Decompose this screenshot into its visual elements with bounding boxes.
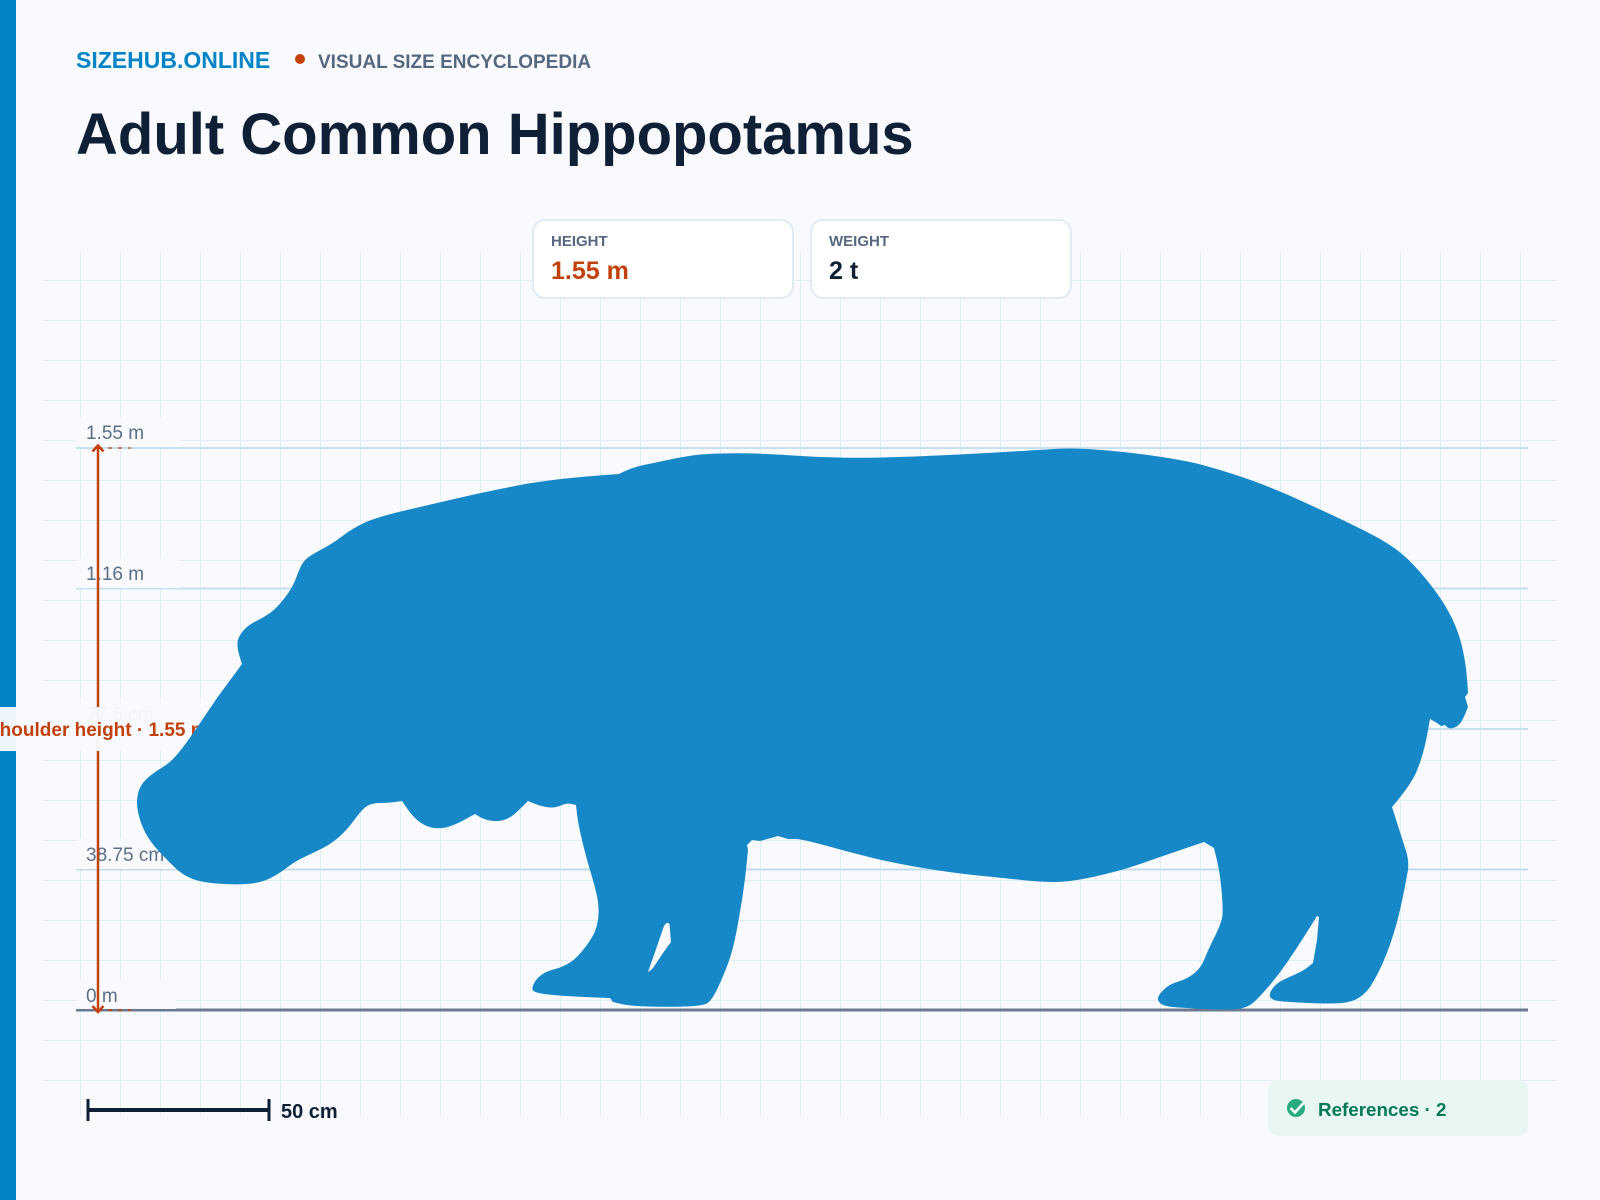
stat card: weight: [811, 220, 1071, 298]
accent stripe: [0, 0, 16, 1200]
ruler label: 0 m: 0 m: [86, 986, 118, 1007]
callout: shoulder height: [0, 707, 230, 751]
ruler label: 1.55 m: 1.55 m: [86, 423, 144, 444]
tagline: VISUAL SIZE ENCYCLOPEDIA: [318, 52, 591, 73]
ruler label: 38.75 cm: [76, 839, 204, 869]
ruler label: 77.5 cm: [76, 699, 204, 728]
stat card: weight: 2 t: [829, 257, 859, 285]
references badge: References · 2: [1318, 1099, 1446, 1120]
ruler label: 77.5 cm: 77.5 cm: [86, 704, 154, 726]
ruler label: 1.55 m: [76, 417, 180, 447]
hippo silhouette: [137, 448, 1468, 1010]
header: [76, 47, 591, 73]
ruler label: 0 m: [76, 980, 176, 1009]
ruler label: 1.16 m: 1.16 m: [86, 564, 144, 585]
brand dot: [295, 54, 305, 64]
ruler lines: [76, 448, 1528, 1010]
stat card: height: HEIGHT: [551, 233, 608, 250]
brand name: SIZEHUB.ONLINE: [76, 47, 270, 73]
stat card: height: [533, 220, 793, 298]
scale bar: 50 cm: [281, 1101, 338, 1123]
ruler label: 1.16 m: [76, 558, 180, 588]
height arrow: [92, 446, 131, 1012]
stat card: weight: WEIGHT: [829, 233, 889, 250]
references badge: [1268, 1080, 1528, 1136]
icon: check: [1287, 1099, 1305, 1117]
stat card: height: 1.55 m: [551, 257, 629, 285]
title: Adult Common Hippopotamus: [76, 102, 914, 167]
ruler label: 38.75 cm: 38.75 cm: [86, 845, 164, 866]
